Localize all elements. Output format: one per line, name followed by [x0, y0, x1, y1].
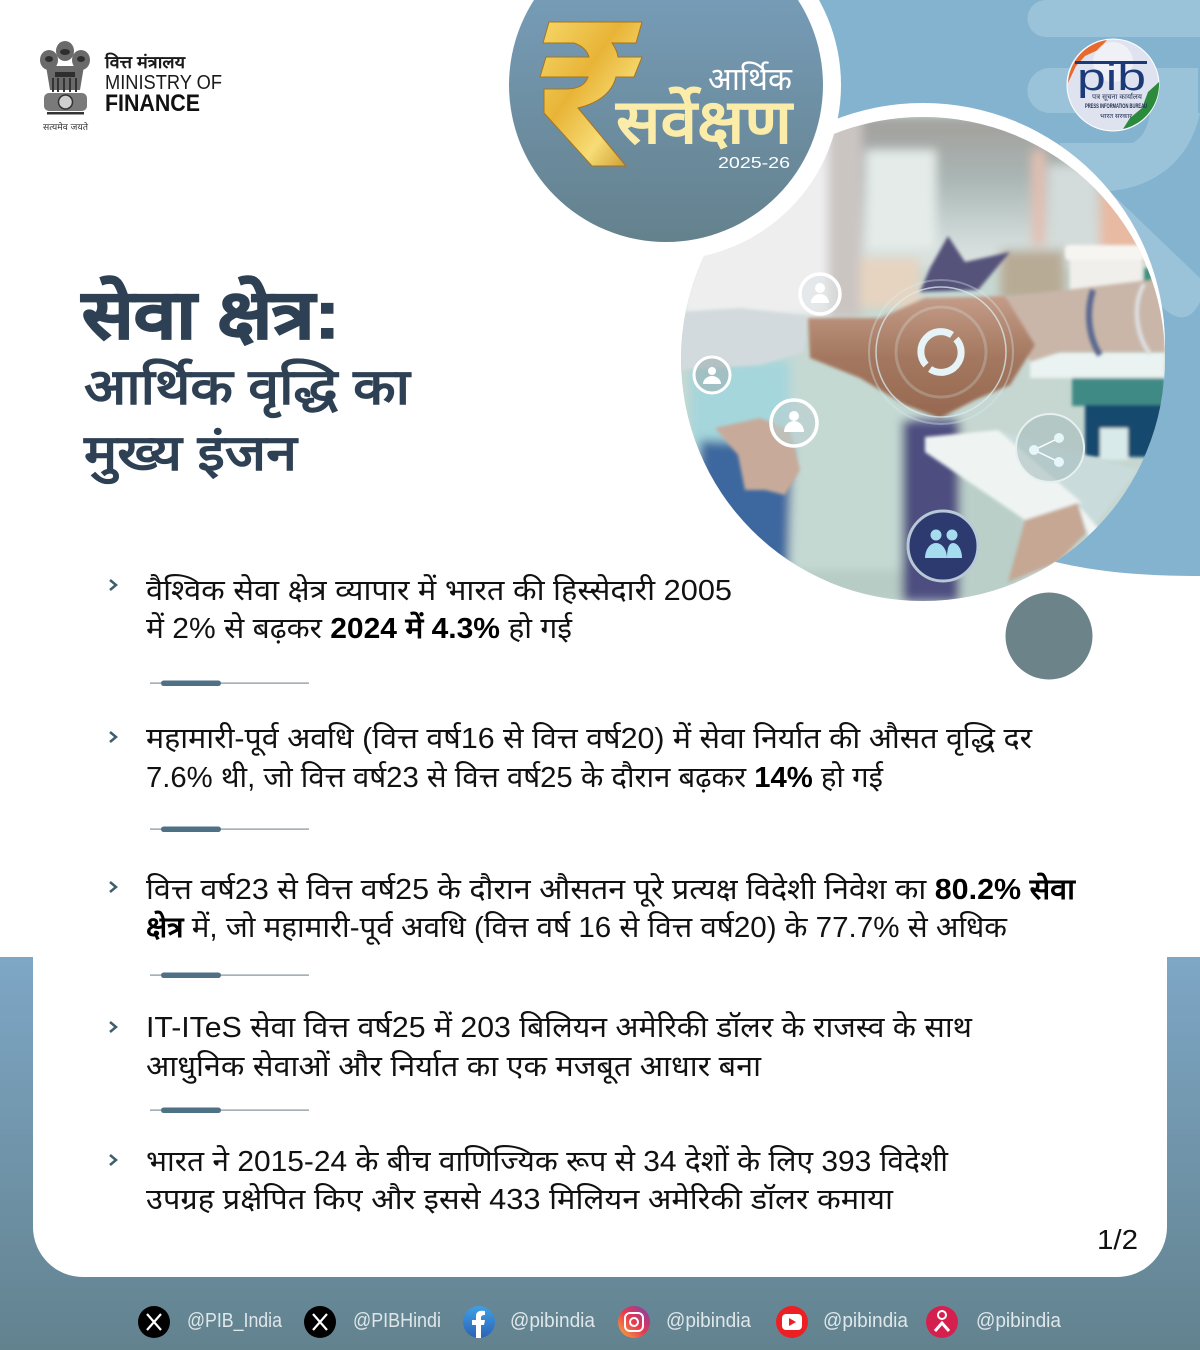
footer band	[0, 957, 1200, 1350]
heading line 2: आर्थिक वृद्धि का	[84, 358, 412, 419]
survey title: aarthik: आर्थिक	[708, 61, 793, 97]
bullet 3: वित्त वर्ष23 से वित्त वर्ष25 के दौरान औसतन पूरे प्रत्यक्ष विदेशी निवेश का 80.2% सेवा	[146, 872, 1077, 907]
right table and dark area	[1030, 352, 1165, 460]
icon: people bubble left	[694, 357, 730, 393]
social: YouTube: @pibindia	[823, 1310, 909, 1332]
tie knot	[920, 236, 1010, 292]
ministry finance: FINANCE	[105, 90, 200, 117]
PIB logo	[1067, 39, 1159, 131]
social: X PIB_India	[138, 1306, 283, 1338]
social: Koo style	[926, 1306, 1062, 1338]
photo white ring	[681, 103, 1165, 587]
survey disc	[509, 0, 823, 242]
divider 1	[150, 680, 309, 686]
survey disc white ring	[491, 0, 841, 260]
social: Facebook	[463, 1306, 596, 1338]
social: Instagram: @pibindia	[666, 1310, 752, 1332]
logo government caption: भारत सरकार	[1100, 114, 1133, 120]
icon: people bubble upper	[800, 274, 840, 314]
divider 4	[150, 1108, 309, 1113]
heading line 3: मुख्य इंजन	[83, 425, 299, 485]
ministry emblem	[40, 41, 90, 114]
bullet 2: महामारी-पूर्व अवधि (वित्त वर्ष16 से वित्त वर्ष20) में सेवा निर्यात की औसत वृद्धि दर	[146, 722, 1033, 756]
seated hand	[715, 418, 800, 495]
bullet 1	[110, 574, 732, 645]
icon: team bubble	[908, 511, 978, 581]
icon: people bubble lower	[771, 400, 817, 446]
logo caption: PRESS INFORMATION BUREAU	[1085, 104, 1147, 110]
coffee cup	[1065, 245, 1152, 296]
logo letters: pib	[1077, 57, 1146, 99]
social: Koo style: @pibindia	[976, 1310, 1062, 1332]
emblem motto: सत्यमेव जयते	[43, 121, 89, 132]
bullet 4: IT-ITeS सेवा वित्त वर्ष25 में 203 बिलियन अमेरिकी डॉलर के राजस्व के साथ	[146, 1011, 972, 1044]
small teal circle	[1006, 592, 1092, 680]
survey title: sarvekshan: सर्वेक्षण	[615, 86, 794, 157]
icon: centre ring	[869, 280, 1013, 424]
icon: gold rupee	[540, 22, 642, 166]
bullet 3	[110, 872, 1077, 945]
heading line 1: सेवा क्षेत्र:	[80, 276, 340, 353]
bullet 1: में 2% से बढ़कर 2024 में 4.3% हो गई	[146, 611, 573, 645]
social: X PIBHindi	[304, 1306, 441, 1338]
bullet 5: भारत ने 2015-24 के बीच वाणिज्यिक रूप से 34 देशों के लिए 393 विदेशी	[146, 1145, 948, 1178]
tablet and paper	[925, 430, 1138, 582]
bullet 3: क्षेत्र में, जो महामारी-पूर्व अवधि (वित्त वर्ष 16 से वित्त वर्ष20) के 77.7% से अधिक	[146, 910, 1008, 945]
social: YouTube	[776, 1306, 909, 1338]
bracelets	[1089, 284, 1150, 355]
social: X PIB_India: @PIB_India	[187, 1310, 283, 1332]
bullet 5: उपग्रह प्रक्षेपित किए और इससे 433 मिलियन अमेरिकी डॉलर कमाया	[146, 1183, 894, 1216]
bullet 2: 7.6% थी, जो वित्त वर्ष23 से वित्त वर्ष25 के दौरान बढ़कर 14% हो गई	[146, 761, 884, 794]
social: X PIBHindi: @PIBHindi	[353, 1310, 441, 1332]
bullet 4: आधुनिक सेवाओं और निर्यात का एक मजबूत आधार बना	[146, 1050, 762, 1084]
clasped hands	[808, 296, 1035, 418]
top right blue shape with rupee watermark	[800, 0, 1200, 576]
left sleeve	[681, 308, 808, 370]
heading	[80, 276, 412, 485]
divider 3	[150, 972, 309, 978]
bullet 4	[110, 1011, 972, 1084]
logo hindi caption: पत्र सूचना कार्यालय	[1092, 92, 1143, 101]
social: Instagram	[618, 1306, 752, 1338]
survey year: 2025-26	[718, 155, 790, 172]
ministry english line: MINISTRY OF	[105, 72, 222, 94]
social: Facebook: @pibindia	[510, 1310, 596, 1332]
ministry hindi name: वित्त मंत्रालय	[104, 52, 186, 72]
page number: 1/2	[1097, 1224, 1138, 1255]
bullet 2	[110, 722, 1033, 794]
photo: handshake	[681, 117, 1165, 601]
right arm	[1000, 278, 1165, 362]
icon: share bubble	[1016, 414, 1084, 482]
bullet 5	[110, 1145, 948, 1216]
divider 2	[150, 826, 309, 832]
bullet 1: वैश्विक सेवा क्षेत्र व्यापार में भारत की हिस्सेदारी 2005	[146, 574, 732, 607]
